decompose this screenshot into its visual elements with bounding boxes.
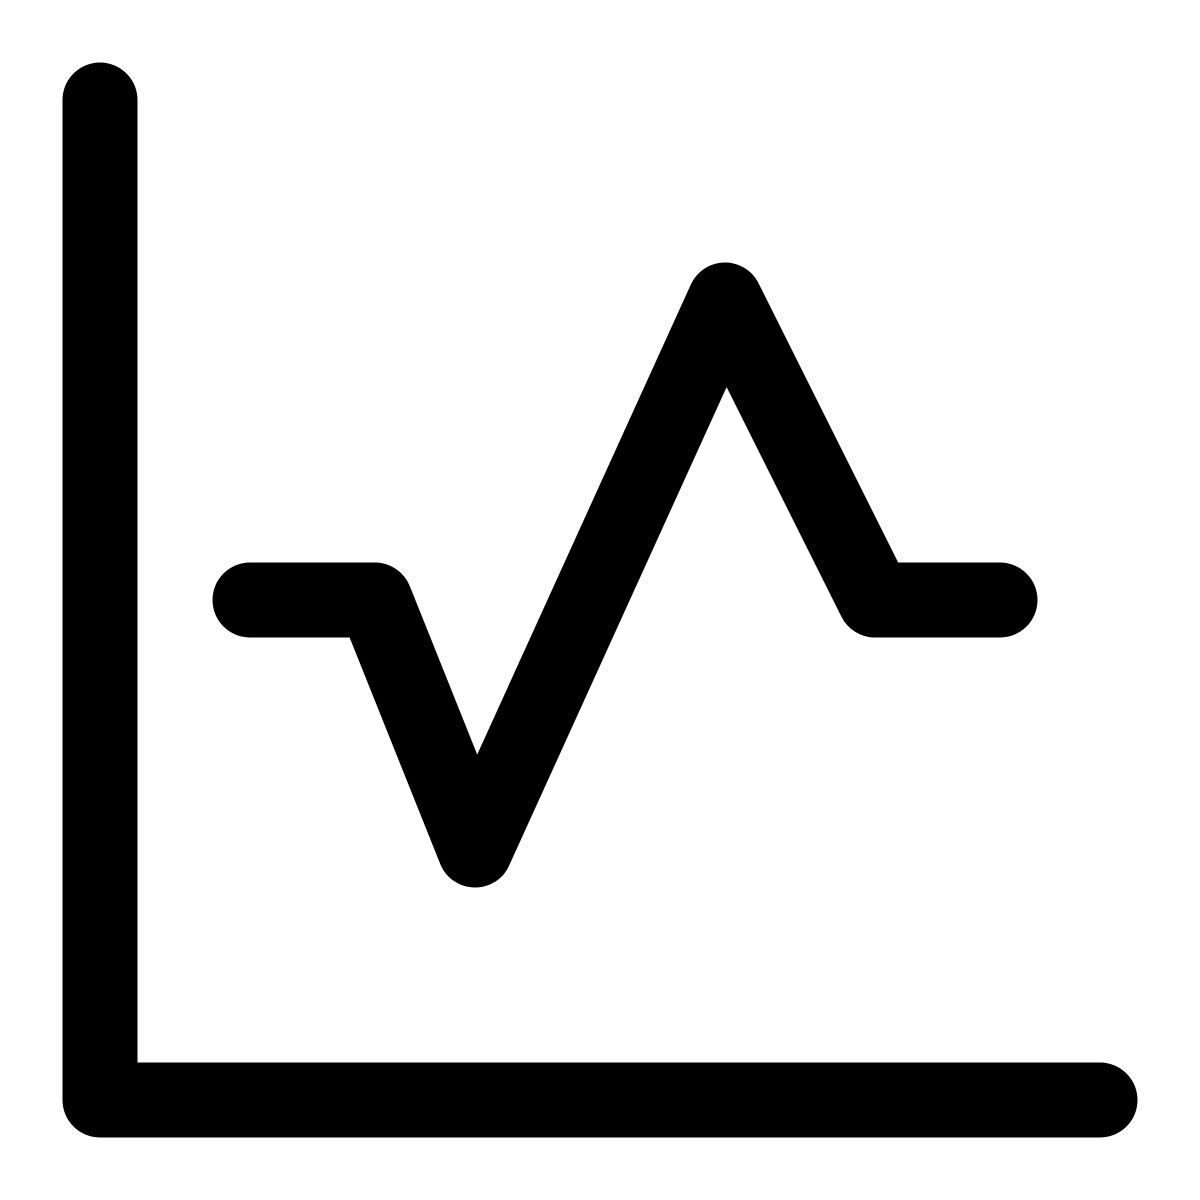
pulse line <box>250 300 1000 850</box>
axes <box>100 100 1100 1100</box>
